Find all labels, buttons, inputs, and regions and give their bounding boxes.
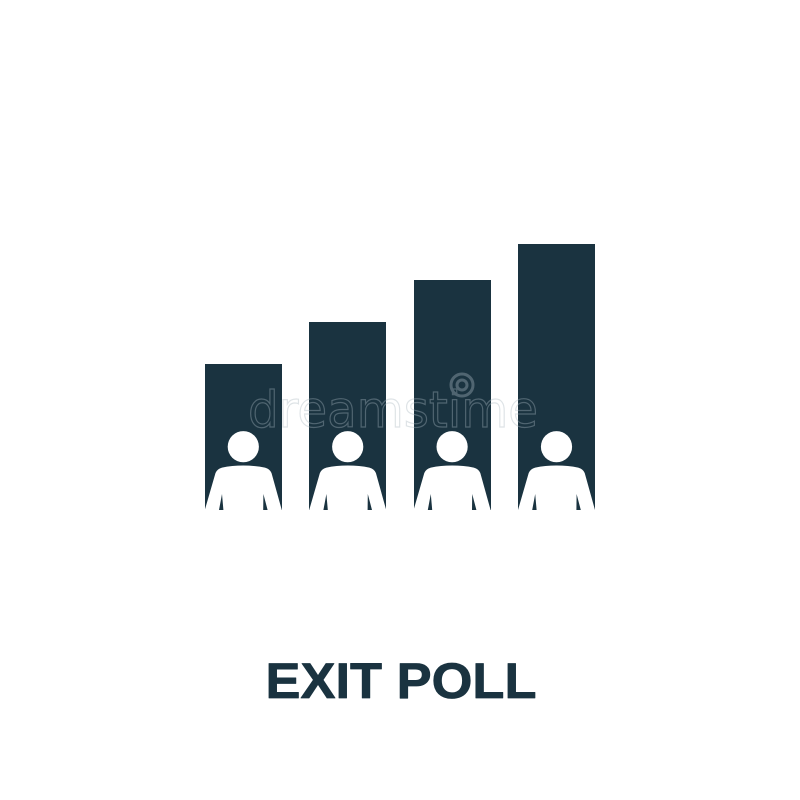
title: EXIT POLL: [266, 653, 536, 709]
icon: person 4: [518, 431, 595, 510]
icon: person 2: [309, 431, 386, 510]
bar 3: [414, 280, 491, 510]
icon: person 1: [205, 431, 282, 510]
bar 4: [518, 244, 595, 510]
icon: person 3: [414, 431, 491, 510]
icon: watermark spiral: [451, 374, 473, 396]
bar 1: [205, 364, 282, 510]
bar 2: [309, 322, 386, 510]
bar chart: four rising bars with people: [205, 244, 595, 510]
watermark: dreamstime: [248, 381, 538, 439]
